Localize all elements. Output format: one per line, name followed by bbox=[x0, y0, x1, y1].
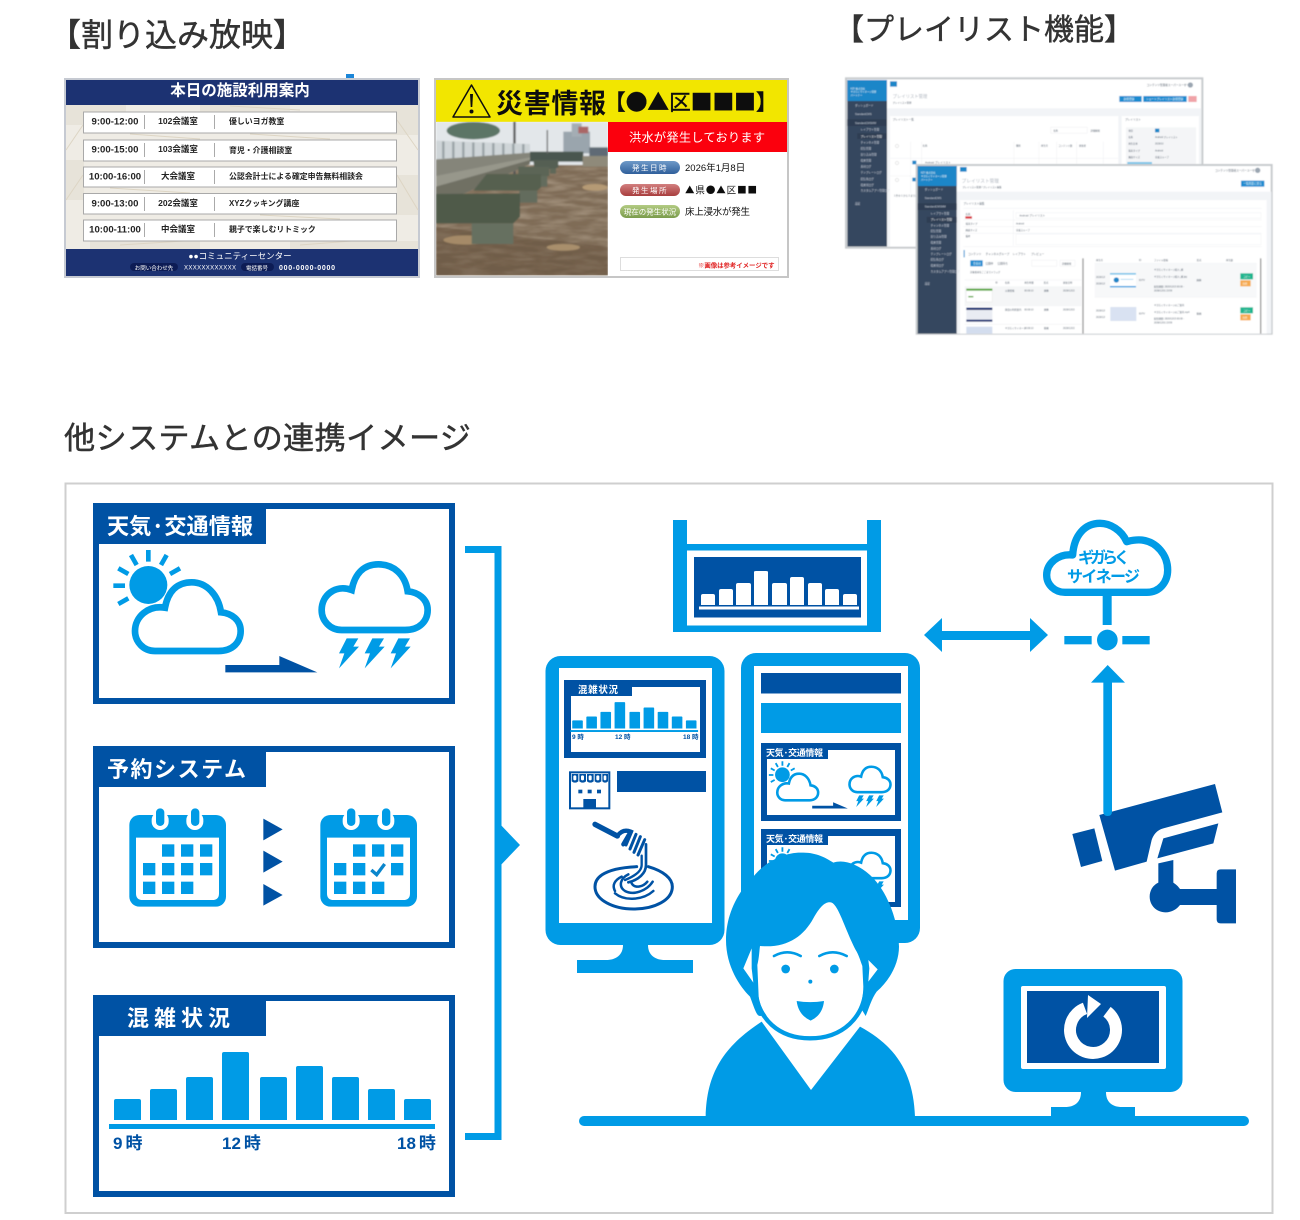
icon: ceiling display bbox=[673, 520, 881, 632]
panel: integration diagram frame bbox=[66, 484, 1272, 1213]
back window: ショートプレイリスト新規登録 bbox=[1146, 97, 1184, 101]
schedule rows: 202会議室 bbox=[158, 198, 198, 208]
front window: 一覧画面に戻る bbox=[1243, 182, 1262, 186]
icon: thunder cloud bbox=[322, 564, 428, 668]
schedule footer: XXXXXXXXXXXX bbox=[184, 266, 236, 272]
front window: 動画 bbox=[1197, 312, 1202, 316]
schedule rows: 大会議室 bbox=[161, 171, 195, 181]
back window: Android bbox=[1155, 149, 1164, 152]
front window: ファイル情報 bbox=[1154, 258, 1169, 262]
info pills and values: 床上浸水が発生 bbox=[685, 206, 750, 218]
back window: プレイリスト一覧 bbox=[893, 118, 914, 122]
info pills and values: 2026年1月8日 bbox=[685, 162, 745, 174]
back window: パートナー bbox=[851, 93, 863, 97]
schedule rows: XYZクッキング講座 bbox=[229, 198, 299, 208]
front window: ギガらくサイネージ紹介_横.jpg bbox=[1154, 275, 1188, 279]
back window: 端末管理 bbox=[861, 158, 872, 162]
signage stand bbox=[577, 945, 693, 973]
front window: 名称 bbox=[1005, 281, 1010, 285]
mini weather panel 2 bbox=[761, 829, 901, 907]
back window: コンテンツ数 bbox=[1058, 143, 1073, 147]
back window: 2020/10 bbox=[1155, 144, 1164, 146]
bar chart: congestion by hour: 12時 bbox=[222, 1134, 261, 1153]
screenshot: facility schedule signage bbox=[65, 74, 419, 277]
front window: カスタムアプリ管理ログ bbox=[931, 269, 960, 273]
back window: StandardCMSMM bbox=[855, 121, 876, 125]
subheading bar bbox=[761, 703, 901, 733]
back window: 1 件中 1 から 2 まで表示 bbox=[894, 194, 920, 198]
front window: コンテンツ管理者スーパーユーザー bbox=[1215, 168, 1258, 172]
front window: ID/TV bbox=[1139, 314, 1145, 316]
front window: ギガらくサイネージのご案内 bbox=[1154, 303, 1185, 307]
front window: 設定 bbox=[925, 281, 930, 285]
hair bbox=[726, 853, 899, 1016]
front window: 再生数 bbox=[1226, 258, 1234, 262]
icon: warning triangle bbox=[453, 85, 490, 117]
front window: 配信先ログ bbox=[931, 258, 944, 262]
schedule rows: 育児・介護相談室 bbox=[229, 145, 292, 155]
back window: 再生比率 bbox=[1128, 142, 1138, 146]
front window: StandardCMS bbox=[925, 196, 942, 200]
icon: security camera bbox=[1072, 784, 1236, 923]
front window: ギガらくサイネージ管理 bbox=[921, 174, 947, 178]
screenshot: facility schedule signage: 本日の施設利用案内 bbox=[170, 82, 310, 100]
front window: 配信期間: 2020/12/15 00:00 - bbox=[1154, 316, 1184, 320]
front window: 00:00:10 bbox=[1024, 309, 1034, 311]
back window bbox=[846, 78, 1202, 248]
front window: ID bbox=[1139, 260, 1142, 262]
back window: 割り込み管理 bbox=[861, 152, 877, 156]
schedule rows bbox=[84, 112, 396, 241]
schedule footer bbox=[66, 249, 418, 276]
icon: shop bbox=[570, 772, 609, 808]
heading: weather and traffic: 天気·交通情報 bbox=[107, 509, 253, 541]
front window: 端末管理 bbox=[931, 241, 942, 245]
back window: 配信先ログ bbox=[861, 177, 874, 181]
front window: プレイリスト管理 / プレイリスト編集 bbox=[962, 185, 1002, 189]
front window: 端末別ログ bbox=[931, 263, 944, 267]
icon: network node bbox=[1064, 630, 1150, 650]
back window: ギガらくサイネージ管理 bbox=[851, 89, 877, 93]
front window: 2030/12/31 23:59 bbox=[1154, 290, 1173, 292]
front window: プレイリスト編集 bbox=[963, 201, 985, 205]
back window: 名称 bbox=[1128, 135, 1134, 139]
schedule footer: 000-0000-0000 bbox=[279, 265, 335, 272]
front window: ダッシュボード bbox=[925, 188, 944, 192]
front window: 施設の利用案内 bbox=[1005, 307, 1022, 311]
back window: プレイリスト管理 bbox=[861, 134, 882, 138]
back window: 項目 bbox=[1128, 128, 1133, 132]
mini congestion chart: 18 時 bbox=[683, 732, 699, 741]
front window bbox=[917, 165, 1272, 335]
front window: KZY 株式会社 bbox=[921, 171, 936, 175]
front window: 00:00:10 bbox=[1024, 328, 1034, 330]
icon: cloud with service name: サイネージ bbox=[1067, 563, 1140, 587]
back window: レイアウト管理 bbox=[861, 128, 880, 132]
back window: 新規登録 bbox=[1124, 97, 1135, 101]
front window: 画像 bbox=[1044, 307, 1049, 311]
front window: 2020/12/ bbox=[1096, 277, 1105, 279]
front window: 2030/12/31 23:59 bbox=[1154, 322, 1173, 324]
front window: レイアウト管理 bbox=[931, 211, 950, 215]
front window: コピー bbox=[1243, 308, 1251, 312]
panel: congestion status bbox=[93, 995, 452, 1194]
heading: reservation system: 予約システム bbox=[107, 752, 246, 784]
back window: 端末タイプ bbox=[1128, 148, 1141, 152]
schedule rows: 中会議室 bbox=[161, 224, 195, 234]
panel: weather and traffic bbox=[93, 503, 452, 701]
front window: 公開待ち bbox=[997, 261, 1008, 265]
icon: pasta and fork bbox=[595, 824, 672, 909]
back window: プレイリスト bbox=[1125, 118, 1141, 122]
screenshot: disaster information signage: 【●▲区■■■】 bbox=[604, 86, 778, 117]
front window: 動画 bbox=[1044, 326, 1049, 330]
back window: StandardCMS bbox=[855, 112, 872, 116]
shirt bbox=[706, 1022, 915, 1117]
front window: パートナー bbox=[921, 177, 933, 181]
front window: Android プレイリスト bbox=[1019, 214, 1046, 218]
panel: left signage display bbox=[546, 656, 724, 973]
front window: ギガらくサイネージ紹介_横 bbox=[1154, 268, 1184, 272]
front window: 画像 bbox=[1197, 278, 1202, 282]
front window: ID/TV bbox=[1139, 280, 1145, 282]
mini weather panel 1 bbox=[761, 743, 901, 821]
front window: 再生時間 bbox=[1024, 281, 1034, 285]
front window: 形式 bbox=[1044, 281, 1049, 285]
bar chart: congestion by hour bbox=[109, 1052, 436, 1153]
front window: 全素材 bbox=[973, 261, 981, 265]
screenshot: disaster information signage: ※画像は参考イメージです bbox=[698, 260, 774, 270]
back window: ダッシュボード bbox=[855, 104, 874, 108]
mini congestion chart: 9 時 bbox=[572, 732, 584, 741]
front window: 2020/12/ bbox=[1096, 317, 1105, 319]
front window: 再生月 bbox=[1096, 258, 1103, 262]
front window: 配信管理 bbox=[931, 229, 942, 233]
photo: flooded river and bridge bbox=[436, 122, 608, 276]
back window: 再生月 bbox=[1041, 143, 1048, 147]
front window: チャンネルグループ bbox=[986, 252, 1010, 256]
back window: 名称 bbox=[1053, 128, 1059, 132]
back window: カスタムアプリ管理ログ bbox=[861, 189, 890, 193]
front window: 削除 bbox=[1243, 315, 1248, 319]
back window: 詳細検索 bbox=[1091, 128, 1101, 132]
front window: ギガらくサイネージ bbox=[1005, 326, 1027, 330]
front window: 公開中 bbox=[985, 261, 994, 265]
schedule rows: 10:00-16:00 bbox=[89, 172, 141, 182]
back window: 素材ログ bbox=[861, 164, 872, 168]
arrow: camera up to network bbox=[1091, 665, 1125, 816]
bar chart: congestion by hour: 9時 bbox=[113, 1134, 142, 1153]
back window: コンテンツ管理者スーパーユーザー bbox=[1147, 83, 1189, 87]
front window: 画面サイズ bbox=[966, 228, 978, 232]
front window: プレビュー bbox=[1031, 252, 1045, 256]
front window: 2020/12/ bbox=[1096, 284, 1105, 286]
mini congestion chart bbox=[564, 680, 706, 758]
front window: 00:00:10 bbox=[1024, 291, 1034, 293]
front window: レイアウト bbox=[1013, 252, 1026, 256]
schedule rows: 公認会計士による確定申告無料相談会 bbox=[229, 171, 363, 181]
heading: congestion status: 混雑状況 bbox=[127, 1001, 230, 1033]
front window: 配信期間: 2020/12/15 00:00 - bbox=[1154, 284, 1184, 288]
info pills and values: 発生日時 bbox=[632, 162, 668, 172]
panel: right signage display bbox=[741, 653, 920, 943]
front window: 全面スルーブ bbox=[1016, 228, 1030, 232]
icon: calendar with check bbox=[320, 808, 417, 907]
schedule rows: 102会議室 bbox=[158, 116, 198, 126]
front window: ギガらくサイネージのご案内.mp4 bbox=[1154, 310, 1190, 314]
front window: 削除 bbox=[1243, 281, 1248, 285]
icon: three arrows bbox=[263, 819, 283, 906]
back window: テンプレートログ bbox=[861, 170, 882, 174]
front window: プレイリスト管理 bbox=[931, 218, 952, 222]
arrow: two-way between display and network bbox=[924, 618, 1048, 652]
info pills and values: 現在の発生状況 bbox=[624, 206, 677, 216]
info pills and values: 発生場所 bbox=[632, 185, 668, 195]
front window: コンテンツ bbox=[968, 252, 982, 256]
back window: 名称 bbox=[923, 143, 928, 147]
back window: Android プレイリスト bbox=[1155, 135, 1178, 139]
bar chart: congestion by hour: 18時 bbox=[397, 1134, 436, 1153]
front window: 2020/12/22 bbox=[1063, 291, 1075, 293]
front window: 備考 bbox=[966, 234, 971, 238]
face bbox=[757, 902, 863, 1034]
icon: cloud with service name bbox=[1047, 523, 1168, 625]
front window: 割り込み管理 bbox=[931, 235, 947, 239]
front window: 更新日時 bbox=[1063, 281, 1073, 285]
icon: calendar bbox=[129, 808, 226, 907]
back window: プレイリスト管理 bbox=[893, 93, 928, 100]
schedule rows: 9:00-12:00 bbox=[92, 116, 138, 128]
schedule footer: お問い合わせ先 bbox=[135, 264, 174, 272]
mini weather panel 2: 天気·交通情報 bbox=[766, 832, 823, 845]
schedule rows: 10:00-11:00 bbox=[89, 224, 141, 236]
screenshot: disaster information signage bbox=[435, 79, 788, 277]
back window: KZY 株式会社 bbox=[851, 86, 866, 90]
back window: プレイリスト管理 bbox=[893, 100, 912, 104]
mini congestion chart: 12 時 bbox=[615, 732, 631, 741]
title: プレイリスト機能: 【プレイリスト機能】 bbox=[834, 5, 1134, 49]
back window: 配信管理 bbox=[861, 146, 872, 150]
icon: sun behind cloud bbox=[113, 550, 241, 651]
front window: 端末タイプ bbox=[966, 221, 978, 225]
screenshot: playlist admin screens bbox=[846, 78, 1272, 335]
back window: 設定 bbox=[855, 201, 861, 205]
info pills and values bbox=[620, 161, 757, 218]
icon: desktop PC monitor with refresh bbox=[1004, 969, 1182, 1118]
thumbnails bbox=[966, 289, 992, 334]
schedule rows: 優しいヨガ教室 bbox=[229, 116, 284, 126]
front window: チャンネル管理 bbox=[931, 223, 950, 227]
front window: 災害情報 bbox=[1005, 289, 1015, 293]
mini congestion chart: 混雑状況 bbox=[578, 682, 618, 696]
front window: 対象素材をここまでドラッグ bbox=[970, 270, 1001, 274]
icon: person at desk bbox=[706, 853, 915, 1117]
icon: desk line bbox=[579, 1116, 1249, 1126]
title: 他システムとの連携イメージ: 他システムとの連携イメージ bbox=[64, 413, 471, 458]
schedule rows: 103会議室 bbox=[158, 144, 198, 154]
schedule footer: ●●コミュニティーセンター bbox=[188, 251, 292, 261]
back window: 画面サイズ bbox=[1128, 155, 1141, 159]
screenshot: disaster information signage: 災害情報 bbox=[496, 82, 606, 121]
front window: StandardCMSMM bbox=[925, 205, 946, 209]
arrow: bracket from sources to signage bbox=[465, 550, 520, 1136]
front window: 素材ログ bbox=[931, 246, 942, 250]
schedule footer: 電話番号 bbox=[246, 265, 268, 272]
schedule rows: 9:00-15:00 bbox=[92, 144, 138, 156]
front window: テンプレートログ bbox=[931, 252, 952, 256]
back window: 更新者 bbox=[1079, 143, 1087, 147]
icon: arrow to the right bbox=[225, 656, 317, 672]
shop name bar bbox=[617, 771, 706, 792]
back window: 全面スルーブ bbox=[1155, 155, 1169, 159]
schedule rows: 親子で楽しむリトミック bbox=[229, 224, 316, 234]
back window: Android プレイリスト bbox=[925, 160, 951, 164]
front window: 2020/12/22 bbox=[1063, 328, 1075, 330]
back window: 種別 bbox=[1016, 143, 1021, 147]
front window: 形式 bbox=[1197, 258, 1202, 262]
front window: ID bbox=[995, 283, 998, 285]
front window: 画像 bbox=[1044, 289, 1049, 293]
icon: cloud with service name: ギガらく bbox=[1078, 544, 1130, 568]
front window: 2020/12/22 bbox=[1063, 309, 1075, 311]
title: 割り込み放映: 【割り込み放映】 bbox=[49, 10, 305, 56]
front window: Android bbox=[1016, 222, 1025, 225]
front window: 名称 bbox=[966, 212, 971, 216]
front window: 詳細検索 bbox=[1062, 261, 1072, 265]
mini weather panel 1: 天気·交通情報 bbox=[766, 746, 823, 759]
back window: チャンネル管理 bbox=[861, 140, 880, 144]
screenshot: disaster information signage: 洪水が発生しております bbox=[629, 130, 765, 144]
headline bar bbox=[761, 673, 901, 694]
info pills and values: ▲県●▲区■■ bbox=[685, 182, 757, 196]
schedule rows: 9:00-13:00 bbox=[92, 198, 138, 210]
front window: プレイリスト管理 bbox=[962, 178, 999, 185]
panel: reservation system bbox=[93, 746, 452, 945]
back window: 端末別ログ bbox=[861, 183, 874, 187]
front window: コピー bbox=[1243, 274, 1251, 278]
front window: 2020/12/ bbox=[1096, 310, 1105, 312]
